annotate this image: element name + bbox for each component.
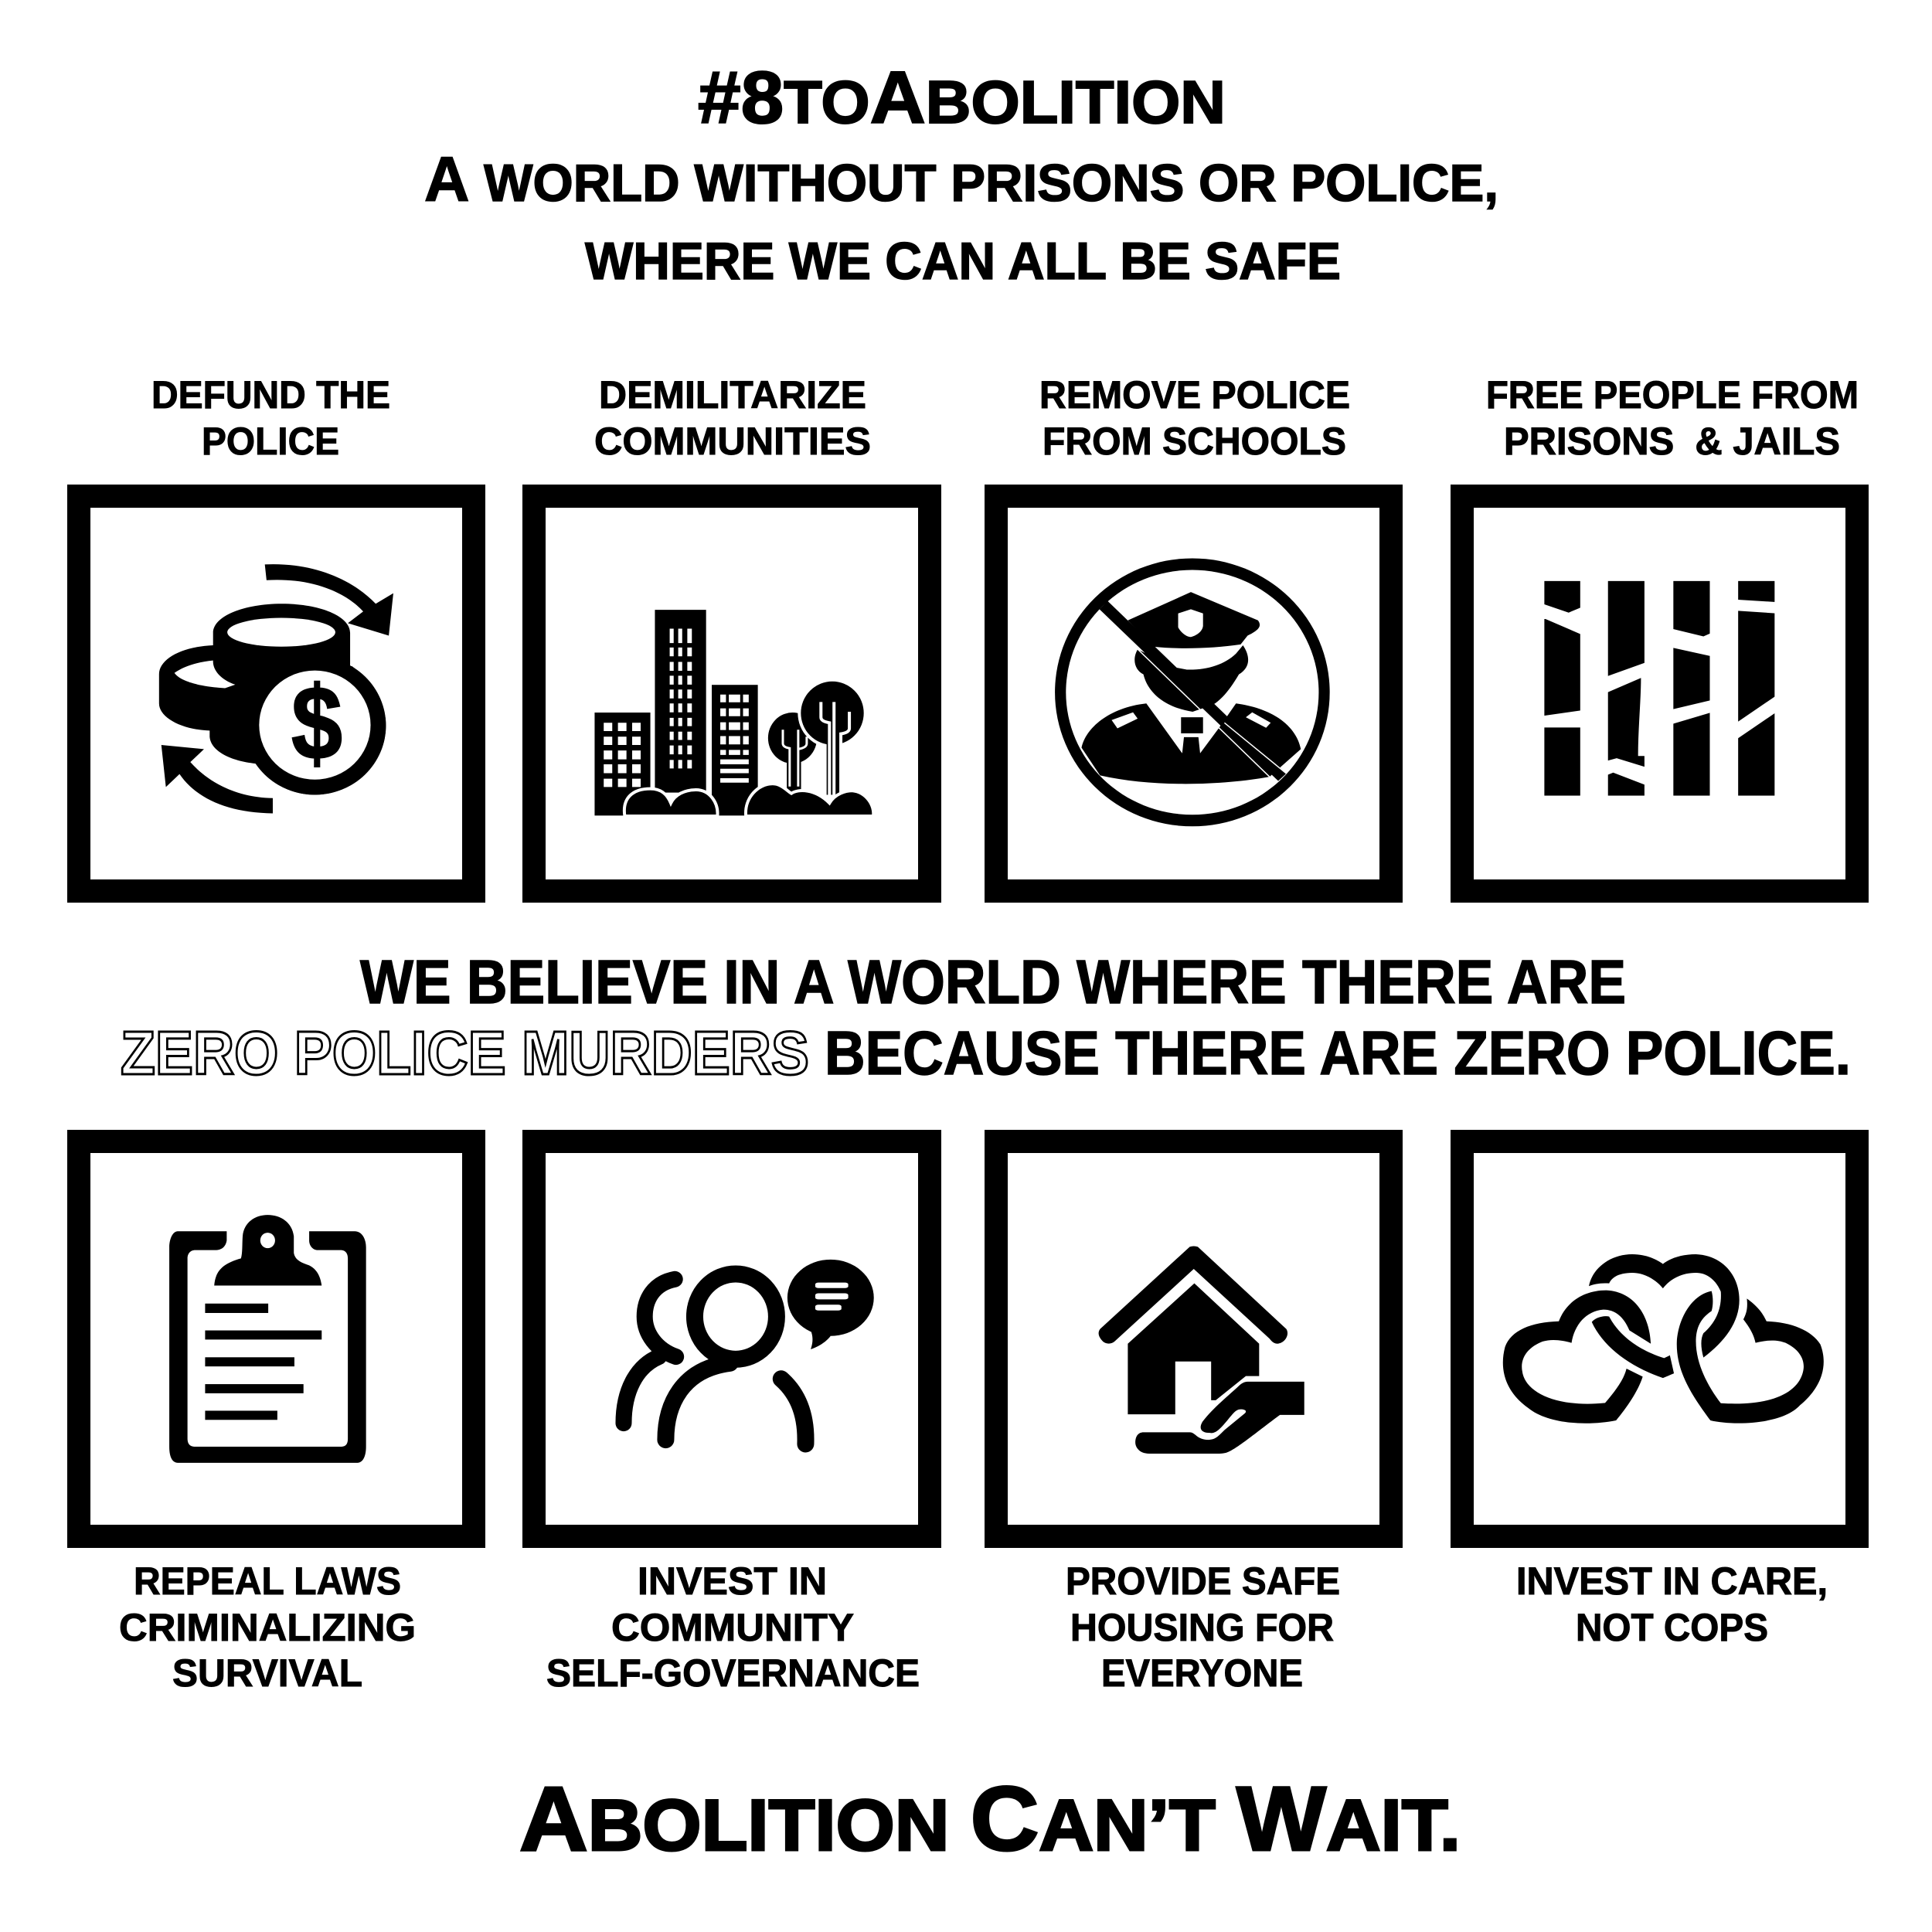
- label: invest in care, not cops: [1516, 1560, 1828, 1649]
- label: provide safe housing for everyone: EVERYONE: [1101, 1651, 1303, 1695]
- label: provide safe housing for everyone: [1066, 1560, 1340, 1695]
- title: #8TOABOLITION: [698, 56, 1226, 139]
- label: defund the police: [151, 373, 390, 463]
- icon: interlinked hearts: [1503, 1254, 1824, 1423]
- footer heading: ABOLITION CAN’T WAIT.: [519, 1768, 1461, 1870]
- icon: clipboard: [169, 1215, 366, 1463]
- label: invest in community self-governance: SELF-GOVERNANCE: [546, 1651, 920, 1695]
- panel: safe housing: [996, 1141, 1391, 1536]
- icon: house in hand: [1099, 1246, 1304, 1454]
- label: demilitarize communities: COMMUNITIES: [594, 420, 871, 463]
- label: invest in community self-governance: COMMUNITY: [611, 1606, 854, 1649]
- label: remove police from schools: FROM SCHOOLS: [1043, 420, 1346, 463]
- label: remove police from schools: [1039, 373, 1350, 463]
- icon: coins with arrows: [159, 564, 393, 813]
- subtitle: WHERE WE CAN ALL BE SAFE: [585, 232, 1341, 291]
- label: invest in community self-governance: INVEST IN: [638, 1560, 827, 1603]
- label: invest in care, not cops: INVEST IN CARE,: [1516, 1560, 1828, 1603]
- panel: care not cops: [1462, 1141, 1857, 1536]
- icon glyph: dollar sign: $: [291, 665, 342, 781]
- label: invest in community self-governance: [546, 1560, 920, 1695]
- label: remove police from schools: REMOVE POLICE: [1039, 373, 1350, 417]
- panel: remove police from schools: [996, 496, 1391, 891]
- mission statement: [121, 947, 1851, 1087]
- label: invest in care, not cops: NOT COPS: [1576, 1606, 1768, 1649]
- icon: city buildings and trees: [594, 610, 873, 816]
- label: repeal laws criminalizing survival: [119, 1560, 416, 1695]
- mission statement: BECAUSE THERE ARE ZERO POLICE.: [825, 1019, 1851, 1087]
- icon: people with speech bubble: [624, 1260, 874, 1444]
- icon: broken prison bars: [1543, 581, 1777, 796]
- icon: crossed-out police officer: [1055, 558, 1330, 826]
- label: repeal laws criminalizing survival: SURVIVAL: [172, 1651, 362, 1695]
- label: free people from prisons and jails: PRISONS & JAILS: [1504, 420, 1840, 463]
- subtitle: A WORLD WITHOUT PRISONS OR POLICE,: [424, 145, 1498, 215]
- outlined text: zero police murders: ZERO POLICE MURDERS: [121, 1019, 809, 1087]
- subtitle: [424, 145, 1498, 291]
- panel: free people from prisons and jails: [1462, 496, 1857, 891]
- label: provide safe housing for everyone: PROVIDE SAFE: [1066, 1560, 1340, 1603]
- label: repeal laws criminalizing survival: REPEAL LAWS: [134, 1560, 401, 1603]
- panel: repeal laws: [79, 1141, 474, 1536]
- label: demilitarize communities: DEMILITARIZE: [599, 373, 866, 417]
- panel: community self-governance: [534, 1141, 930, 1536]
- label: demilitarize communities: [594, 373, 871, 463]
- label: provide safe housing for everyone: HOUSING FOR: [1070, 1606, 1334, 1649]
- mission statement: WE BELIEVE IN A WORLD WHERE THERE ARE: [360, 947, 1626, 1016]
- label: defund the police: POLICE: [202, 420, 339, 463]
- label: free people from prisons and jails: [1486, 373, 1859, 463]
- panel: demilitarize communities: [534, 496, 930, 891]
- label: free people from prisons and jails: FREE PEOPLE FROM: [1486, 373, 1859, 417]
- label: defund the police: DEFUND THE: [151, 373, 390, 417]
- label: repeal laws criminalizing survival: CRIMINALIZING: [119, 1606, 416, 1649]
- panel: defund the police: [79, 496, 474, 891]
